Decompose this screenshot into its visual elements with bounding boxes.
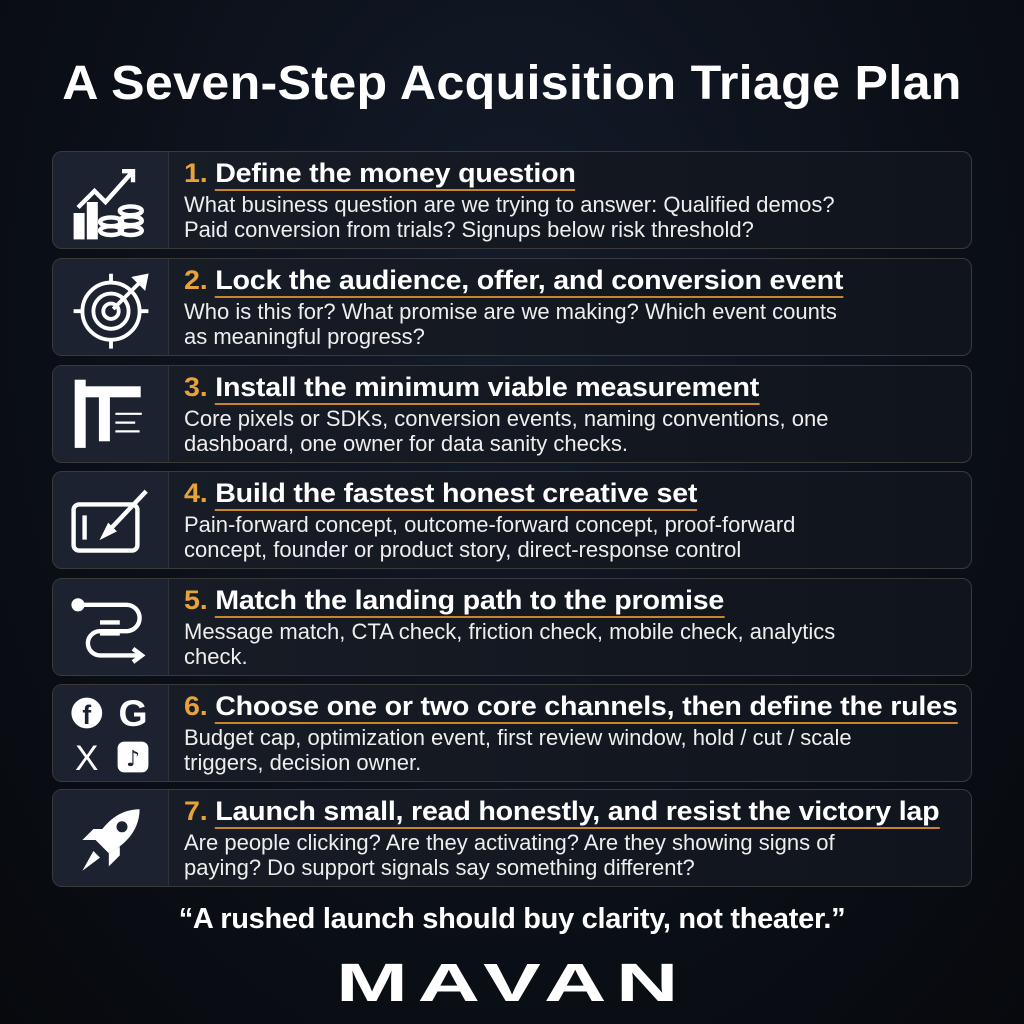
body: paying? Do support signals say something different? [184,855,695,880]
panel: step 5 [52,578,972,676]
body [184,299,837,349]
panel: step 2 [52,258,972,356]
icon: rocket [53,790,169,886]
body: Budget cap, optimization event, first review window, hold / cut / scale [184,725,852,750]
icon: channel logos: G [118,692,148,734]
panel: step 4 [52,471,972,569]
title: A Seven-Step Acquisition Triage Plan [62,57,962,110]
panel: step 7 [52,789,972,887]
body: check. [184,644,248,669]
heading: 2. Lock the audience, offer, and conversion event [184,265,843,295]
icon: tablet pen [53,472,169,568]
icon: channel logos: X [75,739,99,778]
body: Pain-forward concept, outcome-forward concept, proof-forward [184,512,795,537]
icon: target [53,259,169,355]
body: Paid conversion from trials? Signups below risk threshold? [184,217,754,242]
body [184,830,835,880]
icon: channel logos: ♪ [126,747,140,772]
panel: step 1 [52,151,972,249]
body: triggers, decision owner. [184,750,421,775]
heading: 1. Define the money question [184,158,576,188]
panel: step 3 [52,365,972,463]
body: Who is this for? What promise are we making? Which event counts [184,299,837,324]
body [184,725,852,775]
heading: 7. Launch small, read honestly, and resist the victory lap [184,796,939,826]
body: concept, founder or product story, direct-response control [184,537,741,562]
body [184,619,835,669]
body [184,512,795,562]
body: Message match, CTA check, friction check, mobile check, analytics [184,619,835,644]
heading: 6. Choose one or two core channels, then define the rules [184,691,958,721]
panel: step 6 [52,684,972,782]
body [184,406,828,456]
body: Are people clicking? Are they activating? Are they showing signs of [184,830,835,855]
heading: 5. Match the landing path to the promise [184,585,724,615]
body: as meaningful progress? [184,324,425,349]
icon: path arrows [53,579,169,675]
heading: 4. Build the fastest honest creative set [184,478,697,508]
body: dashboard, one owner for data sanity checks. [184,431,628,456]
heading: 3. Install the minimum viable measurement [184,372,759,402]
body [184,192,835,242]
icon: caliper [53,366,169,462]
quote: “A rushed launch should buy clarity, not theater.” [179,903,845,935]
body: Core pixels or SDKs, conversion events, naming conventions, one [184,406,828,431]
icon: channel logos [53,685,169,781]
icon: chart with coins [53,152,169,248]
icon: channel logos: f [82,700,91,730]
logo: MAVAN [336,953,688,1013]
body: What business question are we trying to answer: Qualified demos? [184,192,835,217]
